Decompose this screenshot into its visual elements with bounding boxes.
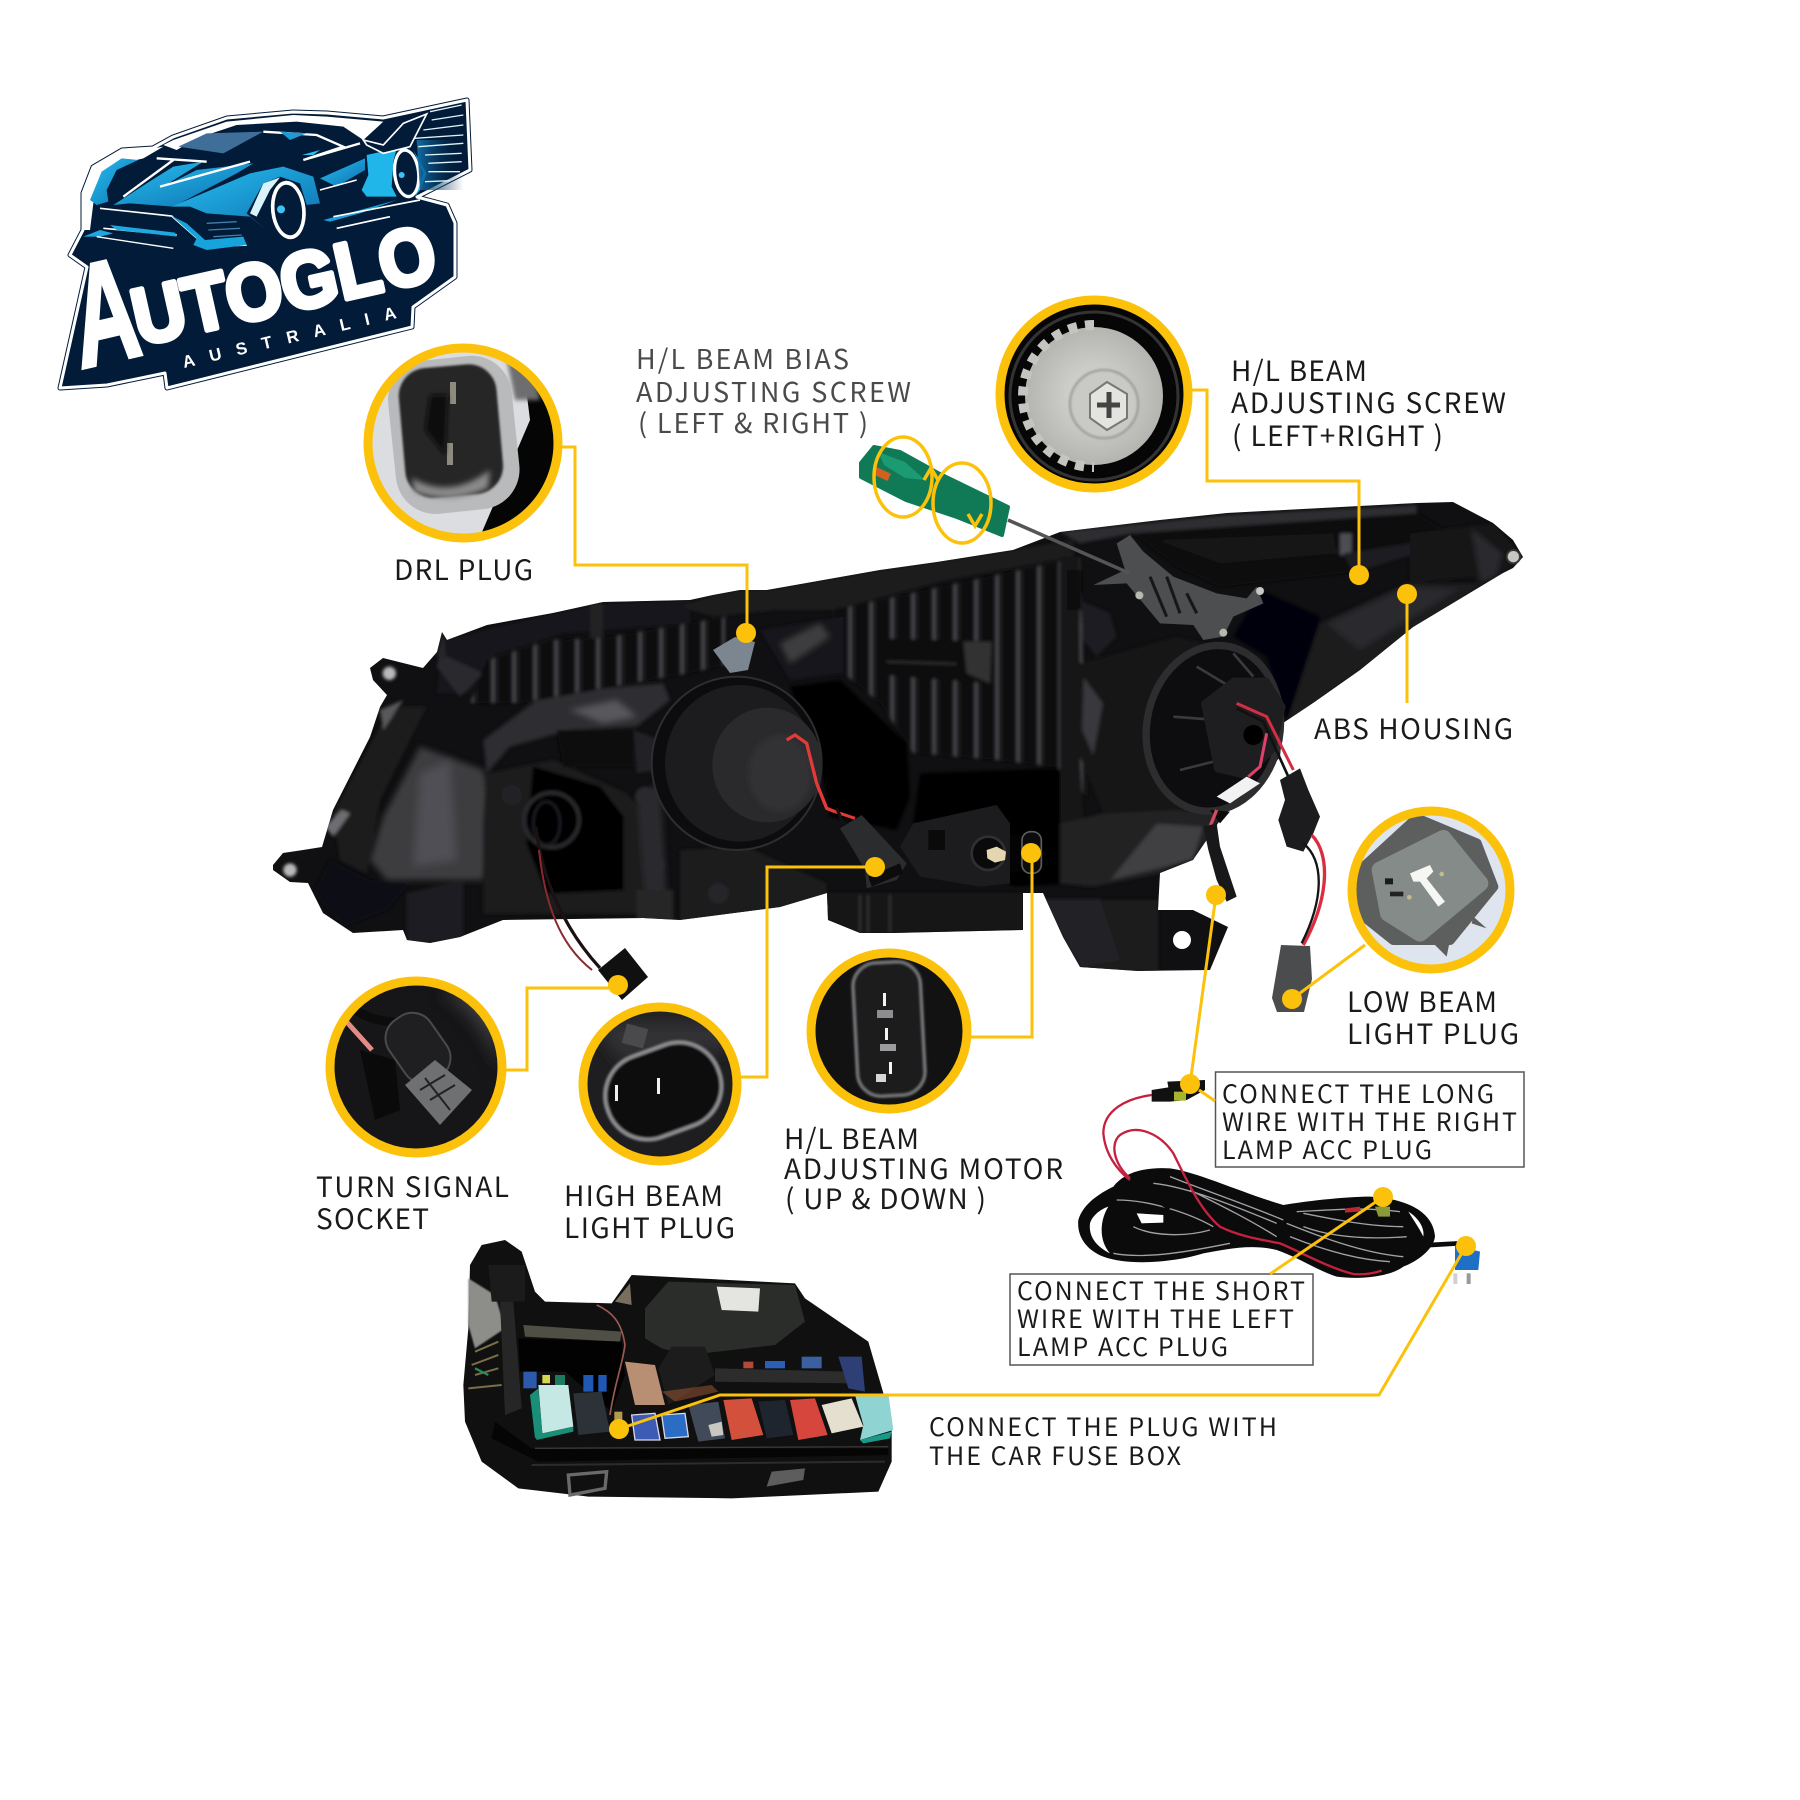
high beam connector and wire — [787, 735, 907, 888]
label: high beam light plug — [564, 1175, 735, 1247]
fuse box relays — [523, 1357, 893, 1443]
label: beam adjusting motor: H/L BEAM — [784, 1118, 919, 1158]
leader: high beam plug — [740, 857, 885, 1077]
left housing panels — [283, 600, 690, 943]
label: connect plug to fuse box — [929, 1408, 1277, 1473]
leader: short wire — [1270, 1187, 1393, 1274]
harness connectors — [1152, 1080, 1205, 1102]
leader: ABS housing — [1397, 584, 1417, 703]
screwdriver handle — [861, 447, 1008, 535]
label: beam adjusting screw: ( LEFT+RIGHT ) — [1232, 415, 1443, 455]
label: beam bias adjusting screw: H/L BEAM BIAS — [636, 338, 849, 377]
callout box: long wire: CONNECT THE LONG — [1222, 1075, 1494, 1111]
label: low beam light plug — [1347, 981, 1519, 1053]
lower bracket — [1080, 900, 1158, 971]
motor tray — [827, 893, 1023, 933]
callout box: short wire: WIRE WITH THE LEFT — [1017, 1300, 1294, 1336]
callout circle: beam adjusting screw — [1000, 300, 1190, 490]
logo: AutoGlo Australia — [60, 100, 470, 399]
label: beam adjusting motor: ADJUSTING MOTOR — [784, 1148, 1063, 1188]
central housing panels — [680, 540, 1077, 920]
callout circle: turn signal socket — [325, 975, 505, 1155]
right housing panels — [1060, 505, 1523, 887]
logo car illustration — [83, 105, 463, 250]
harness tail — [1430, 1243, 1460, 1245]
callout box: short wire — [1010, 1272, 1313, 1365]
housing shading and detail — [283, 505, 1523, 971]
label: DRL plug: DRL PLUG — [394, 549, 533, 589]
headlight housing silhouette — [273, 502, 1523, 971]
leader: DRL plug — [561, 447, 756, 643]
leader: beam adjusting motor — [966, 843, 1041, 1037]
callout box: long wire: WIRE WITH THE RIGHT — [1222, 1103, 1517, 1139]
label: beam adjusting screw: ADJUSTING SCREW — [1231, 382, 1506, 422]
right lamp wiring — [1203, 703, 1325, 945]
leader: turn signal socket — [505, 975, 628, 1070]
label: beam adjusting motor: ( UP & DOWN ) — [785, 1178, 986, 1218]
callout box: short wire: CONNECT THE SHORT — [1017, 1272, 1305, 1308]
turn signal pigtail — [536, 827, 648, 1000]
fuse tap — [1455, 1245, 1480, 1270]
logo badge shape — [60, 100, 470, 388]
callout box: long wire: LAMP ACC PLUG — [1222, 1131, 1432, 1167]
logo wordmark: UTOGLO — [124, 208, 444, 362]
label: high beam light plug: HIGH BEAM — [564, 1175, 723, 1215]
label: low beam light plug: LIGHT PLUG — [1347, 1013, 1519, 1053]
logo subtitle: AUSTRALIA — [181, 303, 398, 372]
callout circle: high beam plug — [580, 1005, 740, 1165]
harness wire highlights — [1113, 1177, 1407, 1262]
headlight assembly — [273, 300, 1524, 1498]
label: beam bias adjusting screw: ( LEFT & RIGHT ) — [638, 402, 868, 441]
DRL plug on housing — [713, 637, 755, 673]
label: beam adjusting screw — [1231, 350, 1506, 455]
high beam bulb cap — [652, 677, 822, 850]
label: ABS housing: ABS HOUSING — [1314, 708, 1513, 748]
callout circle: low beam plug — [1348, 806, 1514, 974]
fuse box module — [518, 1282, 852, 1415]
harness loop gaps — [1090, 1207, 1424, 1253]
label: turn signal socket: SOCKET — [316, 1198, 429, 1238]
bracket hole — [1173, 931, 1191, 949]
fuse box front rail — [492, 1422, 888, 1495]
label: turn signal socket: TURN SIGNAL — [316, 1166, 509, 1206]
fuse box housing — [463, 1240, 892, 1498]
leader: long wire — [1180, 885, 1226, 1101]
leader: fuse box — [609, 1236, 1476, 1439]
label: low beam light plug: LOW BEAM — [1347, 981, 1497, 1021]
label: connect plug to fuse box: THE CAR FUSE BOX — [929, 1437, 1181, 1473]
label: beam adjusting screw: H/L BEAM — [1231, 350, 1367, 390]
right bulb socket — [1133, 635, 1293, 823]
adjuster bracket — [1093, 535, 1520, 640]
fuse box side — [468, 1265, 525, 1415]
callout box: short wire: LAMP ACC PLUG — [1017, 1328, 1228, 1364]
wiring harness — [1078, 1080, 1480, 1284]
leader: low beam plug — [1282, 945, 1365, 1009]
logo wordmark: A — [63, 226, 148, 399]
screwdriver shaft — [1008, 520, 1129, 573]
callout circle: beam adjusting motor — [810, 950, 970, 1110]
screwdriver — [861, 437, 1129, 573]
label: turn signal socket — [316, 1166, 509, 1238]
label: high beam light plug: LIGHT PLUG — [564, 1207, 735, 1247]
harness branch — [1130, 1180, 1170, 1208]
label: beam adjusting motor — [784, 1118, 1063, 1218]
callout circle: DRL plug — [364, 344, 562, 542]
fuse box photo — [463, 1240, 893, 1498]
callout box: long wire — [1216, 1072, 1524, 1167]
low beam plug on wire — [1272, 945, 1312, 1012]
harness red wires — [1103, 1095, 1382, 1274]
beam adjusting motor — [900, 805, 1041, 887]
harness bundle — [1078, 1168, 1435, 1278]
label: connect plug to fuse box: CONNECT THE PLUG WITH — [929, 1408, 1277, 1444]
rotation arrows — [874, 437, 991, 543]
leader: beam adjusting screw — [1192, 390, 1369, 585]
logo wordmark — [63, 208, 444, 399]
label: beam bias adjusting screw — [636, 338, 911, 441]
label: beam bias adjusting screw: ADJUSTING SCREW — [636, 371, 911, 410]
